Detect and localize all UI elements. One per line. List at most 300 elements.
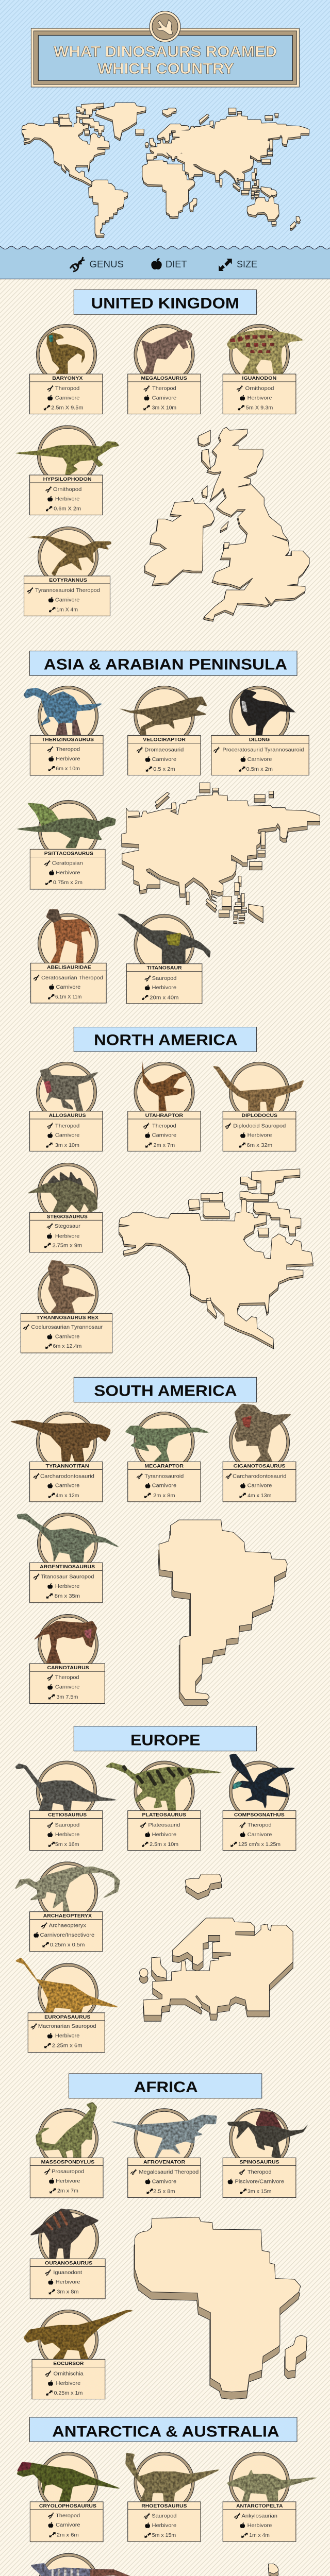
info box: 6m x 32m (246, 1143, 272, 1148)
heading: Antarctica and Australia: ANTARCTICA & AUSTRALIA (52, 2424, 279, 2441)
info box: TYRANNOSAURUS REX (37, 1315, 99, 1320)
info box: Theropod (152, 386, 176, 392)
dinosaur: Stegosaurus (26, 1171, 97, 1212)
medallion (229, 1761, 290, 1821)
world map (22, 103, 309, 238)
legend band (0, 245, 330, 279)
info box: 2m x 8m (153, 1493, 175, 1499)
title: WHAT DINOSAURS ROAMED (54, 43, 277, 60)
dinosaur: Massospondylus (36, 2102, 97, 2159)
dinosaur: Carnotaurus (32, 1621, 97, 1664)
info box: PSITTACOSAURUS (44, 851, 93, 856)
map: South America (158, 1520, 287, 1705)
icon: genus (70, 257, 85, 272)
card: Diplodocus (212, 1062, 304, 1151)
info box: 0.25m x 1m (54, 2391, 82, 2396)
info box (30, 374, 103, 414)
dinosaur: Cryolophosaurus (17, 2462, 122, 2502)
info box: 0.25m x 0.5m (50, 1942, 85, 1948)
info box: 3m x 10m (55, 1143, 79, 1148)
info box: Proceratosaurid Tyrannosauroid (222, 747, 304, 753)
title (54, 43, 277, 77)
info box: 4m x 13m (248, 1493, 272, 1499)
info box (30, 849, 105, 889)
dinosaur: Iguanodon (227, 330, 304, 374)
panel: North America (21, 1027, 313, 1353)
info box: Dromaeosaurid (144, 747, 184, 753)
info box: 1m X 4m (56, 607, 78, 613)
medallion (36, 1412, 97, 1472)
medallion (229, 1062, 290, 1122)
dinosaur: Argentinosaurus (17, 1514, 121, 1563)
info box: AFROVENATOR (143, 2159, 185, 2165)
info box: Plateosaurid (148, 1823, 180, 1828)
heading: United Kingdom: UNITED KINGDOM (91, 295, 239, 312)
info box: 4m x 12m (56, 1493, 79, 1499)
info box: Theropod (55, 1123, 79, 1129)
info box: Carnivore (248, 1483, 272, 1489)
heading: North America: NORTH AMERICA (94, 1032, 238, 1049)
info box: Herbivore (56, 756, 80, 762)
card: Dilong (211, 686, 309, 775)
info box: 0.5m x 2m (246, 767, 273, 772)
info box: Herbivore (56, 870, 80, 876)
info box: Carnivore (152, 757, 177, 762)
medallion (134, 686, 194, 746)
info box: Theropod (55, 386, 79, 392)
heading: Africa: AFRICA (134, 2079, 198, 2096)
info box: STEGOSAURUS (47, 1214, 88, 1219)
info box: Ornithopod (245, 386, 274, 392)
info box: 3m 7.5m (56, 1694, 78, 1700)
info box: 0.5 x 2m (153, 767, 175, 772)
card: Iguanodon (223, 325, 304, 414)
card: Rhoetosaurus (126, 2452, 221, 2541)
info box (30, 2502, 103, 2542)
medallion (38, 1264, 98, 1324)
info box: Stegosaur (55, 1224, 81, 1229)
heading: Africa (69, 2074, 262, 2098)
info box (223, 1810, 296, 1851)
info box: 20m x 40m (150, 995, 179, 1001)
info box: 2m x 7m (154, 1143, 175, 1148)
info box: Carcharodontosaurid (40, 1473, 94, 1479)
dinosaur: Tyrannosaurus Rex (48, 1260, 96, 1314)
heading: North America (74, 1027, 257, 1052)
info box (30, 1912, 103, 1952)
info box: Ornithischia (54, 2371, 84, 2377)
info box: COMPSOGNATHUS (234, 1812, 285, 1818)
medallion (134, 325, 194, 384)
heading: Asia and Arabian Peninsula (30, 651, 297, 675)
info box: SPINOSAURUS (239, 2159, 279, 2165)
info box: Coelurosaurian Tyrannosaur (31, 1325, 103, 1330)
info box (30, 1664, 105, 1704)
title: WHICH COUNTRY (97, 60, 234, 77)
card: Spinosaurus (223, 2109, 310, 2197)
medallion (36, 1761, 97, 1821)
info box: 2m x 6m (57, 2532, 79, 2538)
heading: United Kingdom (74, 290, 257, 314)
medallion (38, 2452, 98, 2513)
dinosaur: Rhoetosaurus (126, 2453, 221, 2502)
info box: Herbivore (248, 2523, 272, 2529)
info box: Tyrannosauroid (144, 1473, 184, 1479)
info box: HYPSILOPHODON (43, 477, 92, 482)
card: Tyrannotitan (9, 1412, 110, 1502)
card: Cryolophosaurus (17, 2452, 122, 2542)
card: Ouranosaurus (29, 2209, 105, 2299)
heading: South America (74, 1377, 257, 1402)
panel: United Kingdom (12, 290, 309, 621)
info box: Carcharodontosaurid (233, 1473, 287, 1479)
card: Argentinosaurus (17, 1513, 121, 1603)
info box: Theropod (248, 2170, 272, 2175)
card: Cetiosaurus (15, 1761, 119, 1851)
card: Utahraptor (128, 1055, 201, 1151)
medallion (229, 2452, 290, 2513)
info box: CETIOSAURUS (48, 1812, 87, 1818)
card: Massospondylus (30, 2102, 103, 2198)
card: Tyrannosaurus Rex (21, 1260, 112, 1353)
info box: 125 cm's x 1.25m (238, 1842, 280, 1848)
info box: 6m x 10m (56, 766, 80, 772)
dinosaur: Allosaurus (40, 1068, 99, 1111)
info box: Theropod (152, 1123, 176, 1129)
info box: 6.1m X 11m (55, 994, 81, 1000)
info box: Theropod (248, 1823, 272, 1828)
info box: DILONG (249, 737, 270, 742)
info box: ARGENTINOSAURUS (40, 1564, 95, 1570)
info box: Herbivore (55, 2033, 80, 2039)
info box: 5m x 15m (152, 2533, 176, 2538)
dinosaur: Titanosaur (117, 913, 210, 964)
medallion (37, 1163, 98, 1223)
dinosaur: Diplodocus (212, 1066, 304, 1111)
map: Asia (122, 783, 320, 924)
panel: South America (9, 1377, 296, 1705)
medallion (36, 1062, 97, 1122)
info box: Herbivore (55, 1233, 80, 1239)
info box: Herbivore (248, 395, 272, 401)
info box: Prosauropod (52, 2169, 84, 2175)
card: Abelisauridae (31, 909, 106, 1003)
info box: Ankylosaurian (242, 2514, 277, 2519)
info box: Carnivore (55, 1133, 80, 1139)
heading: Antarctica and Australia (30, 2417, 297, 2442)
dinosaur: Utahraptor (141, 1055, 186, 1111)
panel: title banner (31, 11, 299, 87)
info box: Carnivore (152, 395, 177, 401)
info box (128, 735, 201, 775)
info box: ABELISAURIDAE (47, 964, 91, 970)
dinosaur: Psittacosaurus (15, 803, 116, 848)
info box (32, 2359, 105, 2399)
dinosaur: Compsognathus (229, 1754, 295, 1809)
info box: Ceratopsian (52, 861, 83, 867)
info box: Sauropod (55, 1823, 79, 1828)
info box: TITANOSAUR (146, 965, 182, 971)
panel: Africa (24, 2074, 310, 2399)
info box: 3m x 8m (57, 2290, 79, 2295)
card: Megaraptor (125, 1412, 210, 1502)
medallion (134, 2452, 194, 2513)
icon: dinosaur footprint badge (150, 11, 180, 42)
info box: VELOCIRAPTOR (143, 737, 186, 742)
info box (21, 1313, 112, 1353)
card: Psittacosaurus (15, 801, 116, 889)
info box (30, 475, 103, 515)
medallion (38, 527, 98, 587)
dinosaur: Dilong (240, 689, 306, 736)
info box: Carnivore (55, 395, 80, 401)
info box: 0.75m x 2m (53, 880, 82, 886)
dinosaur: Megaraptor (125, 1426, 210, 1462)
info box: Carnivore (56, 2522, 80, 2528)
info box: 8m x 35m (55, 1594, 80, 1599)
medallion (38, 1963, 98, 2024)
info box: Ceratosaurian Theropod (41, 975, 103, 981)
dinosaur: Velociraptor (114, 697, 207, 736)
dinosaur: Ouranosaurus (29, 2209, 99, 2259)
info box (31, 963, 106, 1003)
info box: EUROPASAURUS (44, 2014, 91, 2020)
medallion (37, 426, 98, 486)
info box: TYRANNOTITAN (46, 1463, 89, 1469)
info box: 3m x 15m (248, 2189, 272, 2194)
info box: MASSOSPONDYLUS (41, 2159, 95, 2165)
card: Titanosaur (117, 913, 210, 1004)
info box: RHOETOSAURUS (141, 2503, 187, 2509)
info box (211, 735, 309, 775)
info box (223, 2158, 296, 2197)
dinosaur: Afrovenator (107, 2115, 217, 2159)
card: Megalosaurus (128, 325, 201, 414)
background: sky stripes (0, 0, 330, 250)
info box: 5m X 9.3m (246, 405, 273, 411)
info box: Carnivore (55, 1334, 80, 1340)
info box: PLATEOSAURUS (142, 1812, 187, 1818)
info box: Carnivore (55, 1483, 80, 1489)
info box: 1m x 4m (249, 2533, 270, 2538)
info box: CARNOTAURUS (47, 1665, 89, 1671)
map: Antarctica and Australia (128, 2564, 318, 2576)
info box: 2.75m x 9m (53, 1243, 82, 1249)
dinosaur: Abelisauridae (46, 909, 93, 963)
dinosaur: Plateosaurus (105, 1762, 225, 1811)
info box: Carnivore (248, 757, 272, 762)
medallion (229, 2109, 290, 2169)
info box: 2m x 7m (57, 2189, 78, 2194)
legend: genus: GENUS (90, 259, 124, 269)
info box: GIGANOTOSAURUS (234, 1463, 286, 1469)
info box: 0.6m X 2m (54, 506, 81, 512)
dinosaur: Antarctopelta (227, 2469, 320, 2502)
info box: 2.25m x 6m (52, 2043, 82, 2049)
info box: DIPLODOCUS (242, 1113, 278, 1118)
card: Afrovenator (107, 2109, 217, 2197)
dinosaur: Hypsilophodon (12, 442, 119, 475)
panel: Asia and Arabian Peninsula (15, 651, 320, 1004)
card: Velociraptor (114, 686, 207, 775)
card: Giganotosaurus (223, 1404, 296, 1502)
info box (223, 1462, 296, 1502)
card: Hypsilophodon (12, 426, 119, 515)
card: Allosaurus (30, 1062, 103, 1151)
icon: size (219, 259, 232, 271)
info box: Titanosaur Sauropod (41, 1574, 94, 1580)
info box: OURANOSAURUS (45, 2260, 93, 2266)
info box (223, 1111, 296, 1151)
info box: UTAHRAPTOR (145, 1113, 183, 1118)
info box: Sauropod (152, 2514, 176, 2519)
medallion (36, 325, 97, 384)
info box: Herbivore (152, 1832, 177, 1838)
dinosaur: Spinosaurus (227, 2111, 310, 2159)
card: Archaeopteryx (15, 1862, 120, 1952)
dinosaur: Eocursor (24, 2310, 135, 2360)
info box: EOCURSOR (53, 2361, 84, 2366)
info box (223, 374, 296, 414)
medallion (229, 325, 290, 384)
info box: Theropod (56, 2513, 80, 2519)
dinosaur: Europasaurus (15, 1958, 120, 2013)
info box: CRYOLOPHOSAURUS (39, 2503, 97, 2509)
dinosaur: Giganotosaurus (235, 1404, 291, 1462)
info box (30, 1462, 103, 1502)
medallion (38, 686, 98, 746)
info box: Herbivore (56, 2178, 80, 2184)
info box: BARYONYX (52, 376, 83, 381)
info box: Herbivore (55, 1832, 80, 1838)
info box (126, 964, 202, 1004)
info box: Iguanodont (53, 2270, 82, 2276)
card: Antarctopelta (223, 2452, 320, 2541)
map: North America (119, 1169, 313, 1349)
info box: Theropod (56, 747, 80, 753)
heading: Asia and Arabian Peninsula: ASIA & ARABIAN PENINSULA (44, 656, 287, 673)
info box: ARCHAEOPTERYX (43, 1913, 92, 1919)
info box: Carnivore (152, 2179, 177, 2184)
heading: South America: SOUTH AMERICA (94, 1383, 237, 1400)
medallion (37, 1513, 98, 1573)
info box: Herbivore (55, 496, 80, 502)
info box: Megalosaurid Theropod (139, 2170, 199, 2175)
medallion (229, 1412, 290, 1472)
heading: Europe (74, 1726, 257, 1751)
dinosaur: Archaeopteryx (15, 1867, 120, 1911)
dinosaur: Eotyrannus (21, 536, 111, 576)
medallion (134, 1062, 194, 1122)
legend: size: SIZE (237, 259, 257, 269)
info box: Herbivore (152, 2523, 177, 2529)
info box: 6m x 12.4m (53, 1344, 81, 1349)
info box: Herbivore (248, 1133, 272, 1139)
info box: Carnivore (152, 1133, 177, 1139)
info box (128, 1462, 201, 1502)
card: Carnotaurus (30, 1615, 105, 1704)
info box: ALLOSAURUS (49, 1113, 86, 1118)
info box: EOTYRANNUS (49, 578, 88, 583)
info box: Macronarian Sauropod (38, 2024, 96, 2029)
medallion (134, 1412, 194, 1472)
info box: MEGALOSAURUS (141, 376, 188, 381)
dinosaur: Tyrannotitan (9, 1420, 110, 1462)
card: Eocursor (24, 2310, 135, 2399)
info box: Theropod (55, 1675, 79, 1681)
medallion (229, 686, 290, 746)
info box (30, 1212, 103, 1252)
info box (30, 735, 103, 775)
dinosaur: Therizinosaurus (24, 688, 103, 736)
map: Africa (134, 2217, 307, 2399)
panel: Europe (15, 1726, 296, 2053)
info box: Ornithopod (53, 487, 81, 493)
dinosaur: Megalosaurus (141, 330, 192, 374)
info box (30, 2259, 105, 2299)
map: United Kingdom (144, 427, 309, 621)
medallion (38, 801, 99, 860)
info box: Carnivore/Insectivore (40, 1933, 95, 1938)
card: Stegosaurus (26, 1163, 103, 1252)
info box: 2.5m X 9.5m (51, 405, 84, 411)
medallion (37, 1862, 98, 1922)
info box: 2.5m x 10m (150, 1842, 178, 1848)
card: Europasaurus (15, 1958, 120, 2053)
info box: MEGARAPTOR (144, 1463, 184, 1469)
info box (30, 1111, 103, 1151)
info box: Carnivore (248, 1832, 272, 1838)
info box (223, 2502, 296, 2541)
card: Therizinosaurus (24, 686, 103, 775)
info box (128, 2158, 201, 2197)
medallion (134, 914, 194, 975)
medallion (38, 2109, 98, 2169)
medallion (38, 2210, 99, 2270)
info box: Tyrannosauroid Theropod (35, 588, 100, 594)
info box: Piscivore/Carnivore (235, 2179, 285, 2184)
info box: 3m X 10m (152, 405, 176, 411)
info box: Carnivore (56, 985, 81, 990)
info box: Herbivore (56, 2381, 81, 2386)
info box: Carnivore (55, 597, 80, 603)
info box: Diplodocid Sauropod (233, 1123, 286, 1129)
info box: Herbivore (55, 1584, 80, 1589)
panel: Antarctica and Australia (3, 2417, 320, 2576)
heading: Europe: EUROPE (130, 1732, 201, 1749)
card: Baryonyx (30, 325, 103, 414)
info box (128, 374, 201, 414)
info box: Herbivore (152, 985, 177, 991)
info box (128, 1111, 201, 1151)
info box (24, 576, 110, 616)
info box: Archaeopteryx (49, 1923, 86, 1928)
info box (128, 2502, 201, 2541)
info box (128, 1810, 201, 1851)
map: Europe (140, 1874, 293, 2021)
card: Australovenator (26, 2553, 140, 2576)
card: Plateosaurus (105, 1761, 225, 1851)
dinosaur: Baryonyx (47, 333, 85, 374)
info box: Sauropod (152, 976, 176, 981)
info box: Carnivore (55, 1685, 80, 1690)
info box: Herbivore (56, 2279, 80, 2285)
info box: ANTARCTOPELTA (236, 2503, 283, 2509)
card: Compsognathus (223, 1754, 296, 1851)
medallion (38, 913, 98, 974)
dinosaur: Australovenator (30, 2563, 140, 2576)
medallion (38, 2553, 99, 2576)
